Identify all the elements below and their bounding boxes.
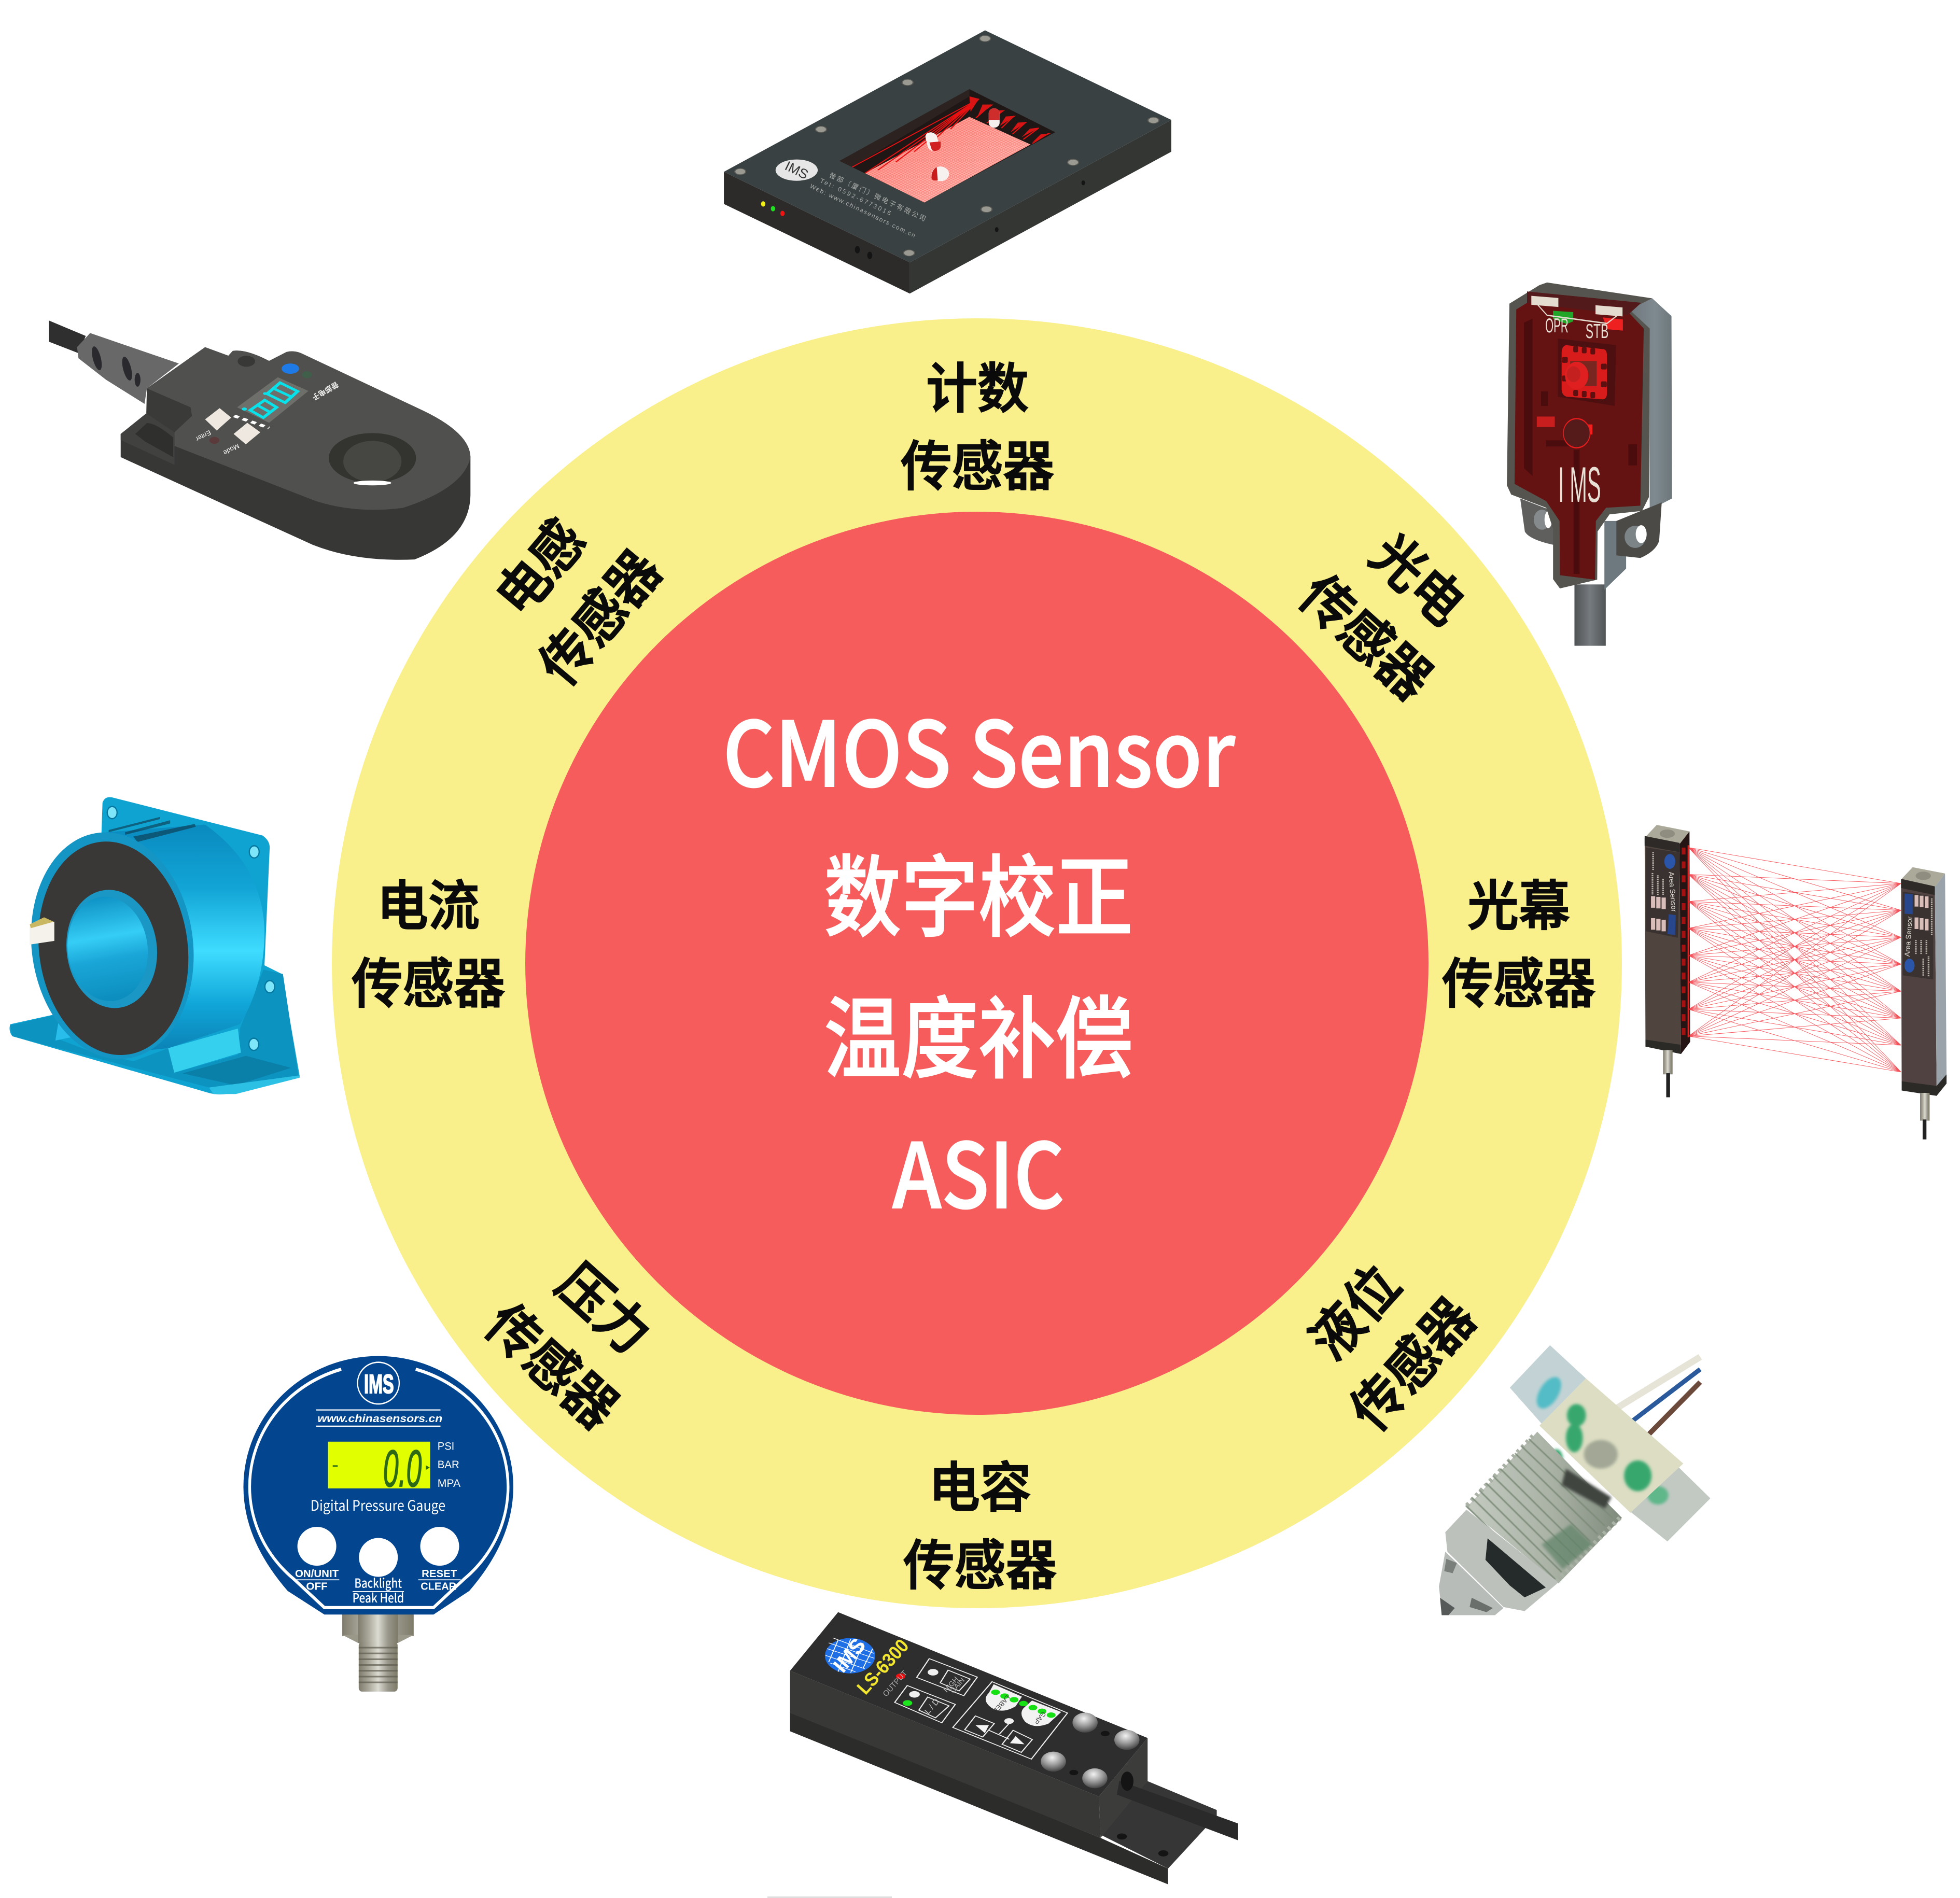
centre text block (723, 682, 1236, 1234)
logo: IMS: IMS (364, 1370, 394, 1399)
label: 压力传感器: 传感器 (472, 1283, 638, 1443)
logo and brand: 普部电子 (310, 379, 341, 403)
button labels and lamp: Enter (194, 429, 213, 443)
right receiver bar (1901, 867, 1947, 1140)
front face ring (16, 820, 208, 1072)
panel: label and gap settings: GAP (1032, 1710, 1047, 1726)
circuit board glimpses (1550, 1404, 1651, 1491)
label: 电流传感器: 传感器 (352, 940, 505, 1018)
logo: IMS: IMS (829, 1634, 870, 1677)
label: 压力传感器: 压力 (542, 1242, 671, 1369)
product: capacitive label sensor (790, 1612, 1238, 1885)
label: 电感传感器 (458, 481, 676, 699)
company text: Tel: 0592-6773016 (819, 177, 892, 217)
label: 电感传感器: 传感器 (517, 531, 676, 699)
indicator markers: OPR and STB: OPR (1545, 314, 1569, 336)
url: www.chinasensors.cn (317, 1413, 442, 1425)
panel: high gain: HIGH (942, 1675, 960, 1694)
panel: label and gap settings (953, 1682, 1068, 1759)
logo and brand (282, 363, 341, 403)
label: 计数传感器: 计数 (926, 345, 1029, 423)
button labels and lamp (194, 429, 241, 457)
outer ring: sensor types (332, 318, 1622, 1608)
text: CMOS Sensor: CMOS Sensor (723, 682, 1236, 812)
button labels and lamp: Mode (222, 442, 241, 457)
left emitter bar: Area Sensor (1667, 871, 1678, 912)
logo: IMS (358, 1362, 399, 1404)
cylinder body (103, 824, 264, 1055)
panel: high gain: GAIN (948, 1676, 966, 1695)
mounting holes (107, 807, 275, 1050)
wires (1617, 1357, 1700, 1436)
panel: high gain (917, 1658, 977, 1696)
inner circle: core technology (525, 512, 1429, 1415)
cable (1574, 584, 1606, 646)
dial face (243, 1356, 513, 1614)
label: 电流传感器 (352, 862, 505, 1018)
label: 压力传感器 (472, 1225, 690, 1443)
mounting bracket (9, 797, 300, 1094)
cable (1117, 1781, 1238, 1840)
label: 光电传感器 (1286, 496, 1504, 714)
status LEDs (761, 201, 785, 216)
digital display (237, 377, 309, 423)
label: 光幕传感器 (1442, 862, 1595, 1018)
infrared beams (1688, 848, 1901, 1072)
company text: 普部（厦门）微电子有限公司 (828, 170, 928, 223)
label: 电流传感器: 电流 (377, 862, 480, 940)
indicator markers: OPR and STB (1531, 296, 1623, 342)
artefact line at the bottom edge (767, 1896, 892, 1898)
product: liquid level sensor (1439, 1345, 1711, 1615)
product: counting sensor (top) (724, 31, 1171, 293)
logo: IMS: IMS (782, 158, 811, 182)
units: MPA (438, 1478, 461, 1489)
label: 计数传感器: 传感器 (901, 423, 1054, 501)
receiver chip (1558, 339, 1616, 406)
label: 液位传感器 (1271, 1226, 1490, 1444)
url (316, 1410, 442, 1426)
units: BAR (438, 1459, 459, 1471)
button labels: CLEAR (421, 1581, 456, 1593)
right receiver bar: Area Sensor (1903, 916, 1914, 957)
product: inductive sensor (49, 320, 470, 560)
label: 电容传感器: 电容 (929, 1444, 1031, 1522)
lower collar and tip (1445, 1510, 1559, 1611)
label: 电容传感器: 传感器 (903, 1522, 1057, 1600)
text: ASIC: ASIC (892, 1104, 1065, 1234)
output indicator: OUTPUT (881, 1669, 909, 1698)
company text: Web: www.chinasensors.com.cn (809, 182, 917, 239)
label: 光电传感器: 传感器 (1286, 554, 1452, 714)
button labels: Backlight (354, 1574, 402, 1592)
label: 计数传感器 (901, 345, 1054, 501)
pills (925, 108, 1000, 181)
terminal (30, 917, 54, 945)
threaded body (1466, 1432, 1622, 1583)
label: 光幕传感器: 传感器 (1442, 940, 1595, 1018)
units (438, 1440, 461, 1489)
label: 电感传感器: 电感 (474, 500, 600, 629)
label: 光电传感器: 光电 (1356, 513, 1486, 640)
product: current sensor (9, 797, 300, 1094)
text: 数字校正: 数字校正 (824, 825, 1133, 955)
button labels (295, 1568, 461, 1607)
product: photoelectric sensor (1507, 283, 1672, 646)
indicator markers: OPR and STB: STB (1586, 319, 1608, 342)
button labels: OFF (306, 1581, 328, 1593)
text: 温度补偿: 温度补偿 (824, 967, 1133, 1096)
label: 液位传感器: 传感器 (1329, 1278, 1490, 1444)
body (121, 347, 470, 560)
text: Digital Pressure Gauge: Digital Pressure Gauge (311, 1495, 445, 1515)
text: IMS: I MS (1558, 457, 1601, 513)
LCD display: 0.0 (383, 1439, 422, 1497)
fitting (342, 1613, 414, 1692)
cable and strain relief (49, 320, 86, 353)
panel: label and gap settings: LABEL (992, 1694, 1012, 1714)
button labels: Peak Held (353, 1588, 404, 1607)
button labels: ON/UNIT (295, 1568, 339, 1580)
LCD display (328, 1439, 430, 1497)
emitter lens (1537, 416, 1592, 448)
panel: L/D (894, 1685, 955, 1723)
model text: LS-6300: LS-6300 (853, 1635, 913, 1698)
product: light curtain (1645, 825, 1947, 1140)
label: 光幕传感器: 光幕 (1467, 862, 1570, 940)
buttons (298, 1527, 459, 1577)
button labels: RESET (422, 1568, 457, 1580)
panel: L/D: L / D (923, 1697, 941, 1716)
product: digital pressure gauge (243, 1356, 513, 1692)
left emitter bar (1645, 825, 1690, 1097)
buttons (205, 408, 269, 444)
label: 电容传感器 (903, 1444, 1057, 1600)
units: PSI (438, 1440, 454, 1453)
through hole (329, 433, 416, 485)
screws (735, 35, 1159, 256)
screws (1041, 1712, 1140, 1788)
label: 液位传感器: 液位 (1288, 1245, 1415, 1374)
bore (59, 883, 165, 1015)
logo: IMS (776, 158, 818, 182)
